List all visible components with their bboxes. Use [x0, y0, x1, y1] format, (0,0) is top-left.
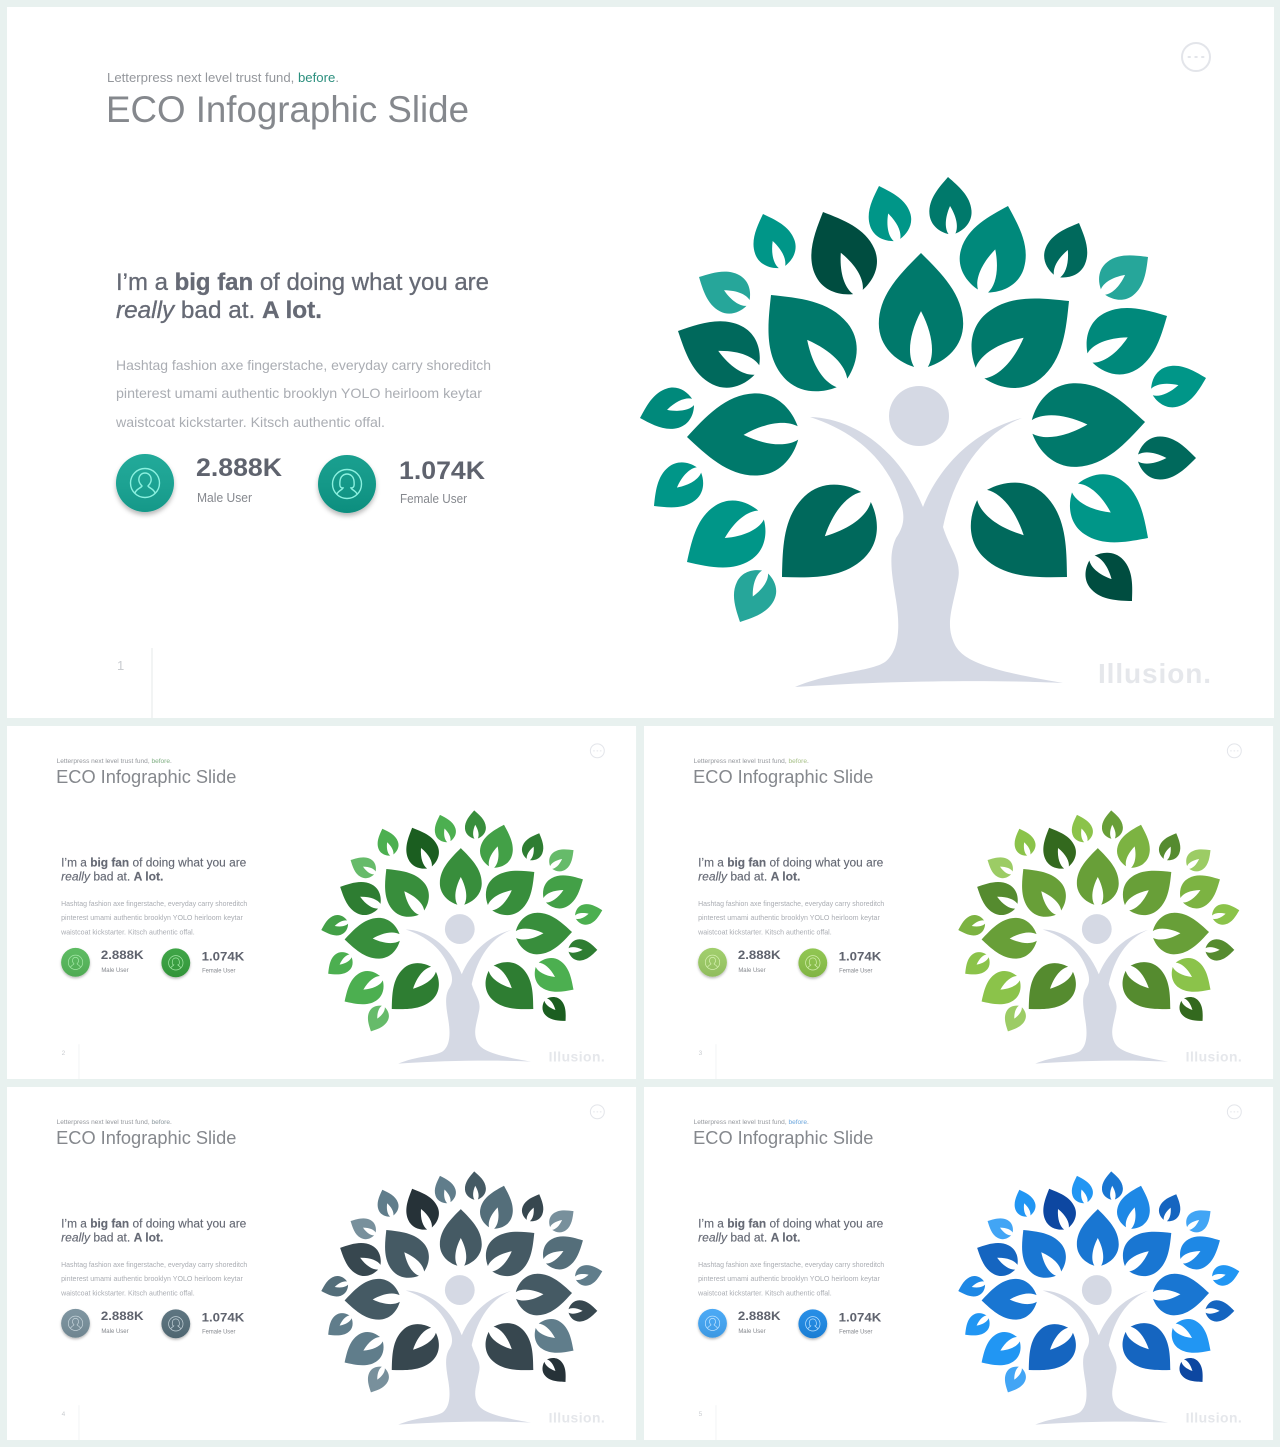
stat: female user — [798, 948, 881, 977]
stat: male user — [698, 1309, 781, 1338]
heading — [116, 269, 489, 324]
stat: male user: 2.888K — [196, 454, 282, 482]
stat: male user: Male User — [101, 1328, 129, 1335]
body text: pinterest umami authentic brooklyn YOLO heirloom keytar — [61, 915, 244, 922]
title: ECO Infographic Slide — [56, 1127, 236, 1148]
brand mark: Illusion. — [1186, 1410, 1242, 1426]
body text: waistcoat kickstarter. Kitsch authentic offal. — [697, 1291, 832, 1298]
eyebrow text: Letterpress next level trust fund, before. — [57, 1119, 172, 1126]
body text: pinterest umami authentic brooklyn YOLO heirloom keytar — [698, 915, 881, 922]
body text: Hashtag fashion axe fingerstache, everyday carry shoreditch — [61, 1262, 247, 1269]
body text: Hashtag fashion axe fingerstache, everyday carry shoreditch — [61, 901, 247, 908]
page number: 2 — [62, 1050, 66, 1057]
page number: 1 — [117, 658, 124, 673]
heading: really bad at. A lot. — [61, 1230, 163, 1244]
body text: waistcoat kickstarter. Kitsch authentic offal. — [697, 930, 832, 937]
body text — [115, 357, 491, 430]
tree illustration — [634, 176, 1211, 687]
panel: lime slide — [644, 726, 1273, 1079]
body text: pinterest umami authentic brooklyn YOLO heirloom keytar — [116, 385, 482, 401]
body text: Hashtag fashion axe fingerstache, everyday carry shoreditch — [698, 1262, 884, 1269]
title: ECO Infographic Slide — [693, 766, 873, 787]
heading: really bad at. A lot. — [698, 1230, 800, 1244]
heading — [698, 1217, 884, 1244]
body text: pinterest umami authentic brooklyn YOLO heirloom keytar — [698, 1276, 881, 1283]
page number: 3 — [699, 1050, 703, 1057]
stat: male user: 2.888K — [738, 1309, 781, 1323]
tree illustration — [955, 810, 1242, 1064]
stat: female user: Female User — [839, 967, 872, 974]
stat: male user: 2.888K — [101, 1309, 144, 1323]
body text: waistcoat kickstarter. Kitsch authentic offal. — [60, 1291, 195, 1298]
heading: I’m a big fan of doing what you are — [116, 269, 489, 296]
heading: I’m a big fan of doing what you are — [698, 1217, 884, 1231]
stat: male user — [698, 948, 781, 977]
tree illustration — [955, 1171, 1242, 1425]
stat: female user: Female User — [202, 967, 235, 974]
tree illustration — [318, 1171, 605, 1425]
body text: pinterest umami authentic brooklyn YOLO heirloom keytar — [61, 1276, 244, 1283]
heading: I’m a big fan of doing what you are — [61, 856, 247, 870]
heading — [61, 1217, 247, 1244]
menu icon — [590, 1105, 604, 1119]
stat: female user: 1.074K — [839, 1310, 881, 1324]
heading: I’m a big fan of doing what you are — [698, 856, 884, 870]
body text — [697, 901, 884, 937]
body text: Hashtag fashion axe fingerstache, everyday carry shoreditch — [698, 901, 884, 908]
panel: green slide — [7, 726, 636, 1079]
body text — [60, 1262, 247, 1298]
stat: female user: Female User — [400, 492, 467, 506]
heading: I’m a big fan of doing what you are — [61, 1217, 247, 1231]
stat: male user: Male User — [197, 491, 252, 505]
title: ECO Infographic Slide — [693, 1127, 873, 1148]
title: ECO Infographic Slide — [56, 766, 236, 787]
stat: female user: 1.074K — [839, 949, 881, 963]
stat: male user: Male User — [738, 967, 766, 974]
panel: blue slide — [644, 1087, 1273, 1440]
stat: male user — [116, 454, 282, 512]
stat: male user: 2.888K — [738, 948, 781, 962]
stat: female user: 1.074K — [399, 457, 485, 485]
body text: waistcoat kickstarter. Kitsch authentic offal. — [60, 930, 195, 937]
panel: slate slide — [7, 1087, 636, 1440]
heading: really bad at. A lot. — [116, 297, 322, 324]
page number: 5 — [699, 1411, 703, 1418]
heading — [61, 856, 247, 883]
eyebrow text: Letterpress next level trust fund, before. — [57, 758, 172, 765]
heading: really bad at. A lot. — [698, 869, 800, 883]
eyebrow text: Letterpress next level trust fund, before. — [694, 1119, 809, 1126]
menu icon — [1227, 744, 1241, 758]
brand mark: Illusion. — [1098, 658, 1211, 689]
brand mark: Illusion. — [1186, 1049, 1242, 1065]
stat: female user: Female User — [839, 1328, 872, 1335]
stat: male user: Male User — [101, 967, 129, 974]
menu icon — [1227, 1105, 1241, 1119]
stat: male user — [61, 1309, 144, 1338]
title: ECO Infographic Slide — [106, 89, 469, 130]
body text: Hashtag fashion axe fingerstache, everyday carry shoreditch — [116, 357, 491, 373]
heading: really bad at. A lot. — [61, 869, 163, 883]
stat: female user — [798, 1309, 881, 1338]
stat: female user — [161, 948, 244, 977]
page number: 4 — [62, 1411, 66, 1418]
stat: male user — [61, 948, 144, 977]
body text — [697, 1262, 884, 1298]
body text — [60, 901, 247, 937]
eyebrow text: Letterpress next level trust fund, before. — [694, 758, 809, 765]
stat: female user — [161, 1309, 244, 1338]
menu icon — [1182, 43, 1210, 71]
brand mark: Illusion. — [549, 1049, 605, 1065]
tree illustration — [318, 810, 605, 1064]
eyebrow text: Letterpress next level trust fund, before. — [107, 70, 339, 85]
stat: female user — [318, 455, 485, 513]
stat: female user: 1.074K — [202, 1310, 244, 1324]
heading — [698, 856, 884, 883]
stat: male user: Male User — [738, 1328, 766, 1335]
stat: female user: 1.074K — [202, 949, 244, 963]
stat: female user: Female User — [202, 1328, 235, 1335]
body text: waistcoat kickstarter. Kitsch authentic offal. — [115, 414, 385, 430]
stat: male user: 2.888K — [101, 948, 144, 962]
panel: main teal slide — [7, 7, 1274, 718]
brand mark: Illusion. — [549, 1410, 605, 1426]
menu icon — [590, 744, 604, 758]
